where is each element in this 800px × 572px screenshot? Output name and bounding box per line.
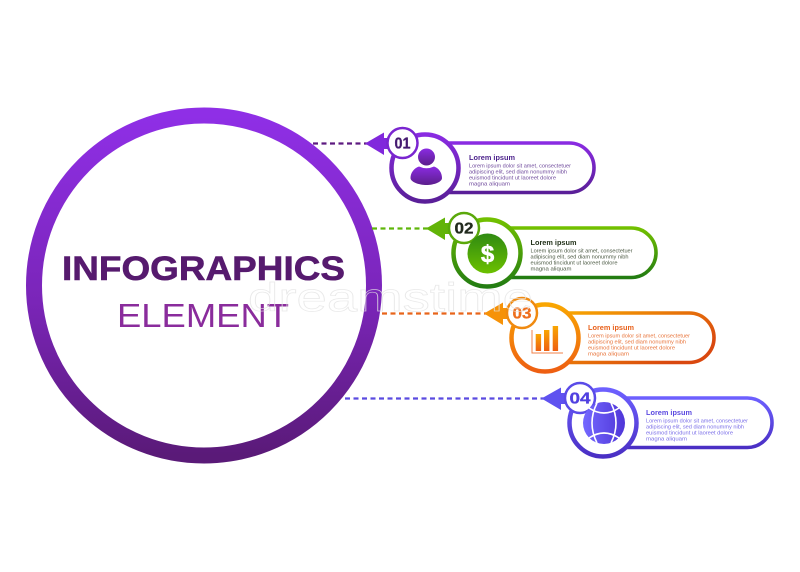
number badge 01 (388, 128, 418, 158)
text block 04: Lorem ipsum (646, 410, 692, 417)
arrow 02 (426, 218, 457, 240)
step circle 03 (512, 304, 578, 372)
step circle 02 (454, 220, 520, 286)
connector dashed line 02 (372, 227, 430, 230)
number badge 04: 04 (570, 390, 591, 408)
text block 03: Lorem ipsum dolor sit amet, consectetuer (588, 334, 690, 340)
watermark: dreamstime (248, 276, 533, 320)
text block 03: euismod tincidunt ut laoreet dolore (588, 346, 675, 352)
connector dashed line 03 (382, 312, 488, 315)
text block 04: euismod tincidunt ut laoreet dolore (646, 430, 733, 436)
text block 04: Lorem ipsum dolor sit amet, consectetuer (646, 418, 748, 424)
text block 03: magna aliquam (588, 352, 630, 358)
arrow 01 (365, 132, 396, 155)
pill panel 04 (598, 398, 772, 448)
number badge 03 (507, 298, 537, 328)
text block 02: adipiscing elit, sed diam nonummy nibh (530, 254, 628, 260)
text block 01 (469, 155, 571, 188)
number badge 03: 03 (512, 306, 532, 322)
connector dashed line 04 (345, 397, 545, 400)
subtitle: ELEMENT: ELEMENT (117, 297, 289, 334)
number badge 04 (565, 383, 595, 413)
icon: globe (583, 402, 625, 444)
icon: dollar coin (468, 234, 508, 274)
step 04 (345, 383, 772, 456)
arrow 03 (484, 302, 515, 325)
text block 01: Lorem ipsum dolor sit amet, consectetuer (469, 164, 571, 170)
number badge 02: 02 (454, 220, 474, 238)
icon: dollar coin: $ (481, 241, 495, 268)
pill panel 03 (540, 313, 714, 362)
pill panel 01 (420, 143, 594, 192)
text block 01: magna aliquam (469, 182, 511, 188)
number badge 01: 01 (394, 136, 411, 152)
step circle 04 (570, 390, 636, 456)
text block 04: magna aliquam (646, 436, 688, 442)
step 02 (372, 213, 656, 286)
arrow 04 (542, 388, 573, 410)
main circle with title (34, 116, 374, 456)
text block 03 (588, 325, 690, 358)
number badge 02 (449, 213, 479, 243)
text block 01: Lorem ipsum (469, 155, 515, 162)
text block 04: adipiscing elit, sed diam nonummy nibh (646, 424, 744, 430)
text block 02: Lorem ipsum (530, 240, 576, 247)
main circle ring (34, 116, 374, 456)
text block 01: adipiscing elit, sed diam nonummy nibh (469, 170, 567, 176)
text block 02 (530, 240, 633, 272)
icon: bar chart (532, 326, 563, 353)
step 01 (313, 128, 594, 202)
connector dashed line 01 (313, 142, 368, 145)
text block 04 (646, 410, 748, 442)
text block 01: euismod tincidunt ut laoreet dolore (469, 176, 556, 182)
step 03 (382, 298, 714, 372)
text block 03: Lorem ipsum (588, 325, 634, 332)
text block 03: adipiscing elit, sed diam nonummy nibh (588, 340, 686, 346)
text block 02: euismod tincidunt ut laoreet dolore (530, 260, 618, 266)
text block 02: Lorem ipsum dolor sit amet, consectetuer (530, 248, 633, 254)
title: INFOGRAPHICS: INFOGRAPHICS (62, 250, 345, 288)
pill panel 02 (482, 228, 656, 278)
step circle 01 (392, 134, 458, 202)
text block 02: magna aliquam (530, 266, 572, 272)
icon: person (410, 148, 442, 185)
